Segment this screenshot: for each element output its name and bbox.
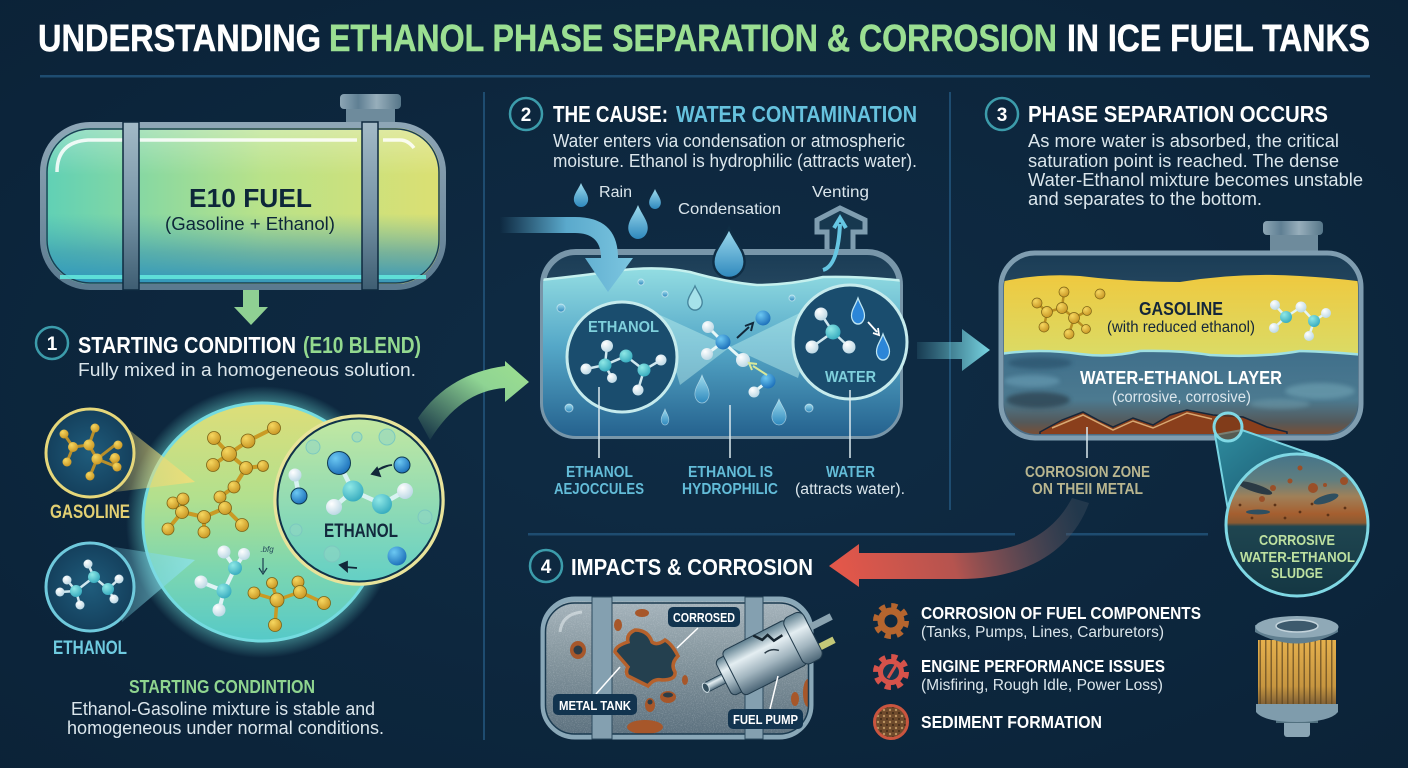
panel: E10 fuel tank bbox=[43, 94, 443, 290]
label: corrosion zone: ON THEII METAL bbox=[1032, 481, 1143, 498]
icons: rain drops and source labels: Venting bbox=[812, 184, 869, 201]
icon: fuel filter bbox=[1255, 616, 1338, 737]
panel: corroded tank bbox=[543, 597, 846, 739]
molecule: gasoline large bbox=[162, 422, 280, 538]
title bbox=[38, 18, 1370, 60]
heading: step 4: 4 bbox=[541, 557, 552, 578]
molecule: gasoline bbox=[1032, 287, 1105, 339]
heading: step 1: 1 bbox=[47, 334, 58, 355]
layer: gasoline bbox=[1000, 275, 1365, 360]
labels: GASOLINE bbox=[1139, 299, 1223, 319]
labels: tank 2 callouts: HYDROPHILIC bbox=[682, 481, 778, 498]
caption: starting condition bbox=[67, 677, 384, 738]
arrow: step 2 to step 3 bbox=[917, 329, 990, 371]
heading: step 3: As more water is absorbed, the critical bbox=[1028, 131, 1339, 151]
impact text 2: (Misfiring, Rough Idle, Power Loss) bbox=[921, 677, 1163, 694]
tank label: E10 FUEL bbox=[189, 183, 312, 213]
rust mound bbox=[1039, 409, 1288, 434]
title: UNDERSTANDING bbox=[38, 18, 321, 60]
icon: condensation drop bbox=[713, 228, 745, 278]
zoom circle: water bbox=[793, 285, 907, 399]
layer: water-ethanol bbox=[1000, 351, 1365, 440]
panel: water entering tank bbox=[500, 208, 907, 440]
label: fuel pump: FUEL PUMP bbox=[733, 712, 798, 727]
impact text 1 bbox=[921, 603, 1201, 641]
molecules: centre bbox=[701, 310, 776, 398]
heading: step 3: 3 bbox=[997, 105, 1007, 126]
icon: sediment bbox=[874, 706, 908, 738]
labels: tank 2 callouts: ETHANOL bbox=[566, 464, 633, 481]
heading: step 1: (E10 BLEND) bbox=[303, 332, 421, 358]
label: corrosion zone: CORROSION ZONE bbox=[1025, 464, 1150, 481]
labels: WATER-ETHANOL LAYER bbox=[1080, 368, 1282, 388]
title: ETHANOL PHASE SEPARATION & CORROSION bbox=[329, 18, 1057, 60]
heading: step 3: and separates to the bottom. bbox=[1028, 189, 1262, 209]
zoom circle: ethanol: ETHANOL bbox=[588, 319, 659, 336]
small mark: .bfg bbox=[260, 545, 274, 554]
heading: step 3: saturation point is reached. The dense bbox=[1028, 151, 1339, 171]
impact text 2: ENGINE PERFORMANCE ISSUES bbox=[921, 656, 1165, 676]
heading: step 2: 2 bbox=[521, 105, 531, 126]
label: corroded: CORROSED bbox=[673, 610, 735, 625]
heading: step 3: PHASE SEPARATION OCCURS bbox=[1028, 101, 1328, 127]
arrow: rain inflow bbox=[500, 217, 633, 292]
arrow: step 1 to step 2 bbox=[418, 361, 529, 440]
impact text 3: SEDIMENT FORMATION bbox=[921, 712, 1102, 732]
zoom circle: water: WATER bbox=[825, 369, 876, 386]
heading: step 4: IMPACTS & CORROSION bbox=[571, 554, 813, 580]
label: metal tank bbox=[553, 694, 637, 715]
heading: step 1: Fully mixed in a homogeneous solution. bbox=[78, 359, 416, 380]
tank label: (Gasoline + Ethanol) bbox=[165, 214, 335, 234]
part: fuel pump bbox=[691, 599, 846, 712]
labels: tank 2 callouts: AEJOCCULES bbox=[554, 481, 644, 498]
heading: step 1: STARTING CONDITION bbox=[78, 332, 296, 358]
sludge text: WATER-ETHANOL bbox=[1240, 549, 1355, 566]
icons: rain drops and source labels bbox=[574, 183, 869, 239]
sludge text: CORROSIVE bbox=[1259, 532, 1335, 549]
heading: step 3 bbox=[986, 98, 1363, 209]
labels bbox=[1080, 299, 1282, 406]
labels: (corrosive, corrosive) bbox=[1112, 389, 1251, 406]
impact text 2 bbox=[921, 656, 1165, 694]
icon: gear gauge bbox=[876, 657, 906, 687]
small mark bbox=[259, 545, 274, 574]
callout: gasoline bbox=[46, 409, 195, 523]
heading: step 2: Water enters via condensation or atmospheric bbox=[553, 131, 905, 151]
labels: tank 2 callouts bbox=[554, 387, 905, 498]
heading: step 2 bbox=[510, 98, 917, 171]
labels: tank 2 callouts: WATER bbox=[826, 464, 875, 481]
list: impacts bbox=[874, 603, 1201, 738]
sludge text bbox=[1240, 532, 1355, 582]
molecule: ethanol bbox=[1269, 300, 1331, 341]
icon: rusty gear bbox=[876, 606, 906, 636]
label: fuel pump bbox=[728, 709, 803, 729]
heading: step 3: Water-Ethanol mixture becomes unstable bbox=[1028, 170, 1363, 190]
caption: starting condition: STARTING CONDINTION bbox=[129, 677, 315, 697]
impact text 1: (Tanks, Pumps, Lines, Carburetors) bbox=[921, 624, 1164, 641]
diagram: mixed fuel circle bbox=[126, 386, 398, 658]
heading: step 1 bbox=[36, 327, 421, 380]
impact text 1: CORROSION OF FUEL COMPONENTS bbox=[921, 603, 1201, 623]
arrow: vent bbox=[823, 218, 846, 270]
label: ETHANOL bbox=[324, 521, 398, 542]
caption: starting condition: Ethanol-Gasoline mixture is stable and bbox=[71, 699, 375, 719]
icons: rain drops and source labels: Condensation bbox=[678, 201, 781, 218]
label: gasoline: GASOLINE bbox=[50, 502, 130, 523]
molecule: ethanol lower bbox=[194, 546, 250, 616]
heading: step 4 bbox=[530, 550, 813, 582]
icons: rain drops and source labels: Rain bbox=[599, 184, 632, 201]
label: corroded bbox=[668, 607, 740, 627]
labels: (with reduced ethanol) bbox=[1107, 319, 1255, 336]
tank label bbox=[165, 183, 335, 234]
leader lines bbox=[596, 628, 778, 709]
callout: ethanol bbox=[46, 543, 195, 659]
label: ethanol: ETHANOL bbox=[53, 638, 127, 659]
molecule: gasoline lower bbox=[248, 576, 330, 632]
heading: step 2: WATER CONTAMINATION bbox=[676, 101, 917, 127]
callout: corrosive sludge bbox=[1214, 413, 1368, 596]
label: corrosion zone bbox=[1025, 427, 1150, 498]
panel: separated tank bbox=[1000, 221, 1365, 440]
label: metal tank: METAL TANK bbox=[559, 698, 632, 713]
caption: starting condition: homogeneous under normal conditions. bbox=[67, 718, 384, 738]
zoom circle: ethanol bbox=[567, 302, 677, 412]
sludge text: SLUDGE bbox=[1271, 565, 1323, 582]
labels: tank 2 callouts: ETHANOL IS bbox=[688, 464, 773, 481]
arrow: step 3 to step 4 bbox=[829, 498, 1089, 587]
heading: step 2: THE CAUSE: bbox=[553, 101, 668, 127]
labels: tank 2 callouts: (attracts water). bbox=[795, 481, 905, 498]
heading: step 2: moisture. Ethanol is hydrophilic (attracts water). bbox=[553, 151, 917, 171]
drops bbox=[557, 279, 813, 425]
zoom circle: ethanol bbox=[275, 416, 443, 584]
arrow: tank to step 1 bbox=[234, 290, 268, 325]
